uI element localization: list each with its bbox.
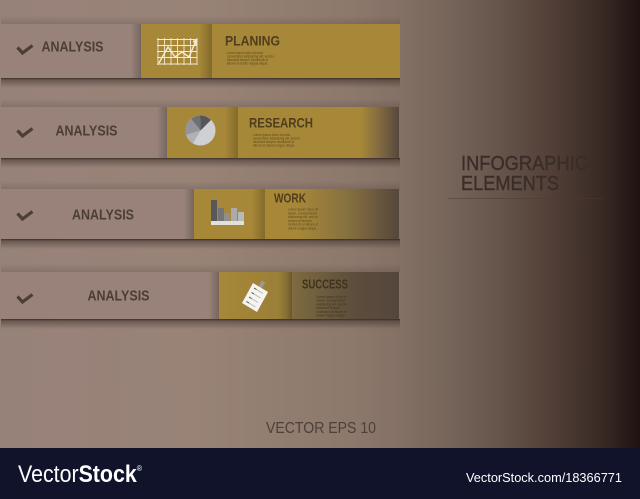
text block: work: amet, consectetur	[288, 211, 318, 215]
heading: research: RESEARCH	[249, 114, 313, 130]
icon: line chart	[157, 38, 198, 65]
text block: success: eiusmod tempor	[316, 306, 341, 310]
logo: vectorstock: ®	[137, 464, 142, 473]
icon: bar chart	[211, 200, 244, 225]
heading: success: SUCCESS	[302, 278, 348, 292]
text block: work: dolore magna aliqua.	[288, 226, 317, 230]
footer url: VectorStock.com/18366771	[466, 470, 622, 485]
gold band 2	[167, 107, 399, 158]
title: infographic elements	[461, 152, 588, 195]
text block: planing	[227, 51, 274, 66]
panel: planing row	[1, 16, 400, 88]
text block: work: adipisicing elit, sed do	[288, 215, 318, 219]
icon: check 4	[18, 294, 32, 302]
icon: check 2	[18, 128, 32, 136]
panel: success row	[1, 264, 400, 329]
icon: check 3	[18, 212, 32, 219]
label: analysis 1: ANALYSIS	[42, 40, 104, 56]
analysis tab 3	[1, 189, 194, 239]
analysis tab 2	[1, 107, 167, 158]
label: analysis 2: ANALYSIS	[56, 124, 118, 140]
panel: research row	[1, 99, 400, 168]
text block: research	[253, 133, 300, 148]
title: infographic elements: INFOGRAPHIC	[461, 152, 588, 175]
text block: planing: eiusmod tempor incididunt ut	[227, 58, 269, 62]
label: analysis 4: ANALYSIS	[88, 288, 150, 304]
icon: check 1	[18, 46, 32, 53]
text block: success: incididunt ut labore et	[316, 310, 347, 314]
text block: success: dolore magna aliqua.	[316, 314, 346, 318]
analysis tab 1	[1, 24, 141, 78]
text block: research: consectetur adipisicing elit, sed do	[253, 136, 300, 140]
text block: work: eiusmod tempor	[288, 219, 313, 223]
text block: success: Lorem ipsum dolor sit	[316, 295, 347, 299]
icon: pie chart	[185, 115, 216, 146]
text block: research: Lorem ipsum dolor sit amet,	[253, 133, 291, 137]
title: infographic elements: ELEMENTS	[461, 172, 559, 195]
gold band 1	[141, 24, 400, 78]
logo: vectorstock: VectorStock	[18, 461, 144, 488]
text block: research: labore et dolore magna aliqua.	[253, 144, 295, 148]
text block: work: incididunt ut labore et	[288, 223, 319, 227]
text block: planing: consectetur adipisicing elit, sed do	[227, 54, 274, 58]
label: analysis 3: ANALYSIS	[72, 208, 134, 224]
text block: work: Lorem ipsum dolor sit	[288, 208, 319, 212]
icon: clipboard	[242, 280, 268, 312]
text block: work	[288, 208, 319, 230]
text block: success: adipisicing elit, sed do	[316, 302, 346, 306]
footer bar	[0, 448, 640, 499]
text block: planing: Lorem ipsum dolor sit amet,	[227, 51, 264, 55]
text block: research: eiusmod tempor incididunt ut	[253, 140, 295, 144]
panel: work row	[1, 181, 400, 249]
text block: planing: labore et dolore magna aliqua.	[227, 62, 268, 66]
text block: success	[316, 295, 347, 318]
text block: success: amet, consectetur	[316, 299, 346, 303]
gold band 3	[194, 189, 399, 239]
heading: planing: PLANING	[225, 32, 280, 48]
heading: work: WORK	[274, 192, 306, 206]
analysis tab 4	[1, 272, 219, 319]
gold band 4	[219, 272, 399, 319]
caption: vector eps 10: VECTOR EPS 10	[266, 420, 376, 437]
